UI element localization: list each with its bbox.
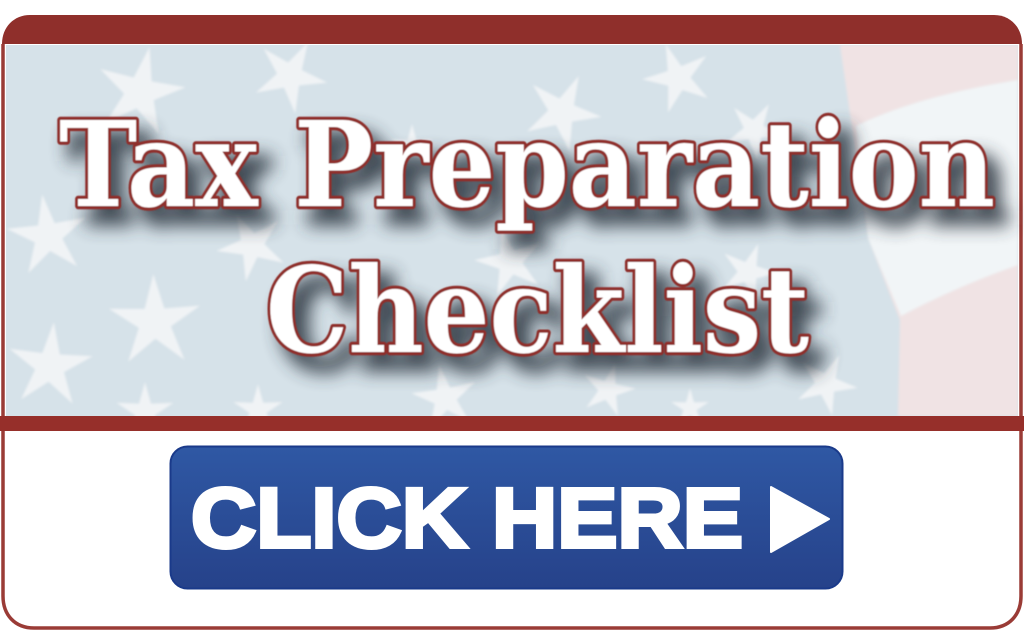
title line 2: Checklist: [266, 241, 809, 380]
stars on the blue canton: [3, 32, 867, 436]
top maroon band: [2, 15, 1022, 44]
button: click here: [170, 446, 842, 588]
title: [59, 95, 995, 380]
icon: play arrow: [771, 487, 829, 552]
panel: flag background: [3, 32, 1018, 436]
title shadow: [71, 110, 1007, 395]
flag red and white stripes: [840, 45, 1018, 416]
title shadow: Checklist: [279, 256, 822, 395]
middle maroon band: [0, 416, 1024, 431]
button label: CLICK HERE: [191, 471, 743, 565]
